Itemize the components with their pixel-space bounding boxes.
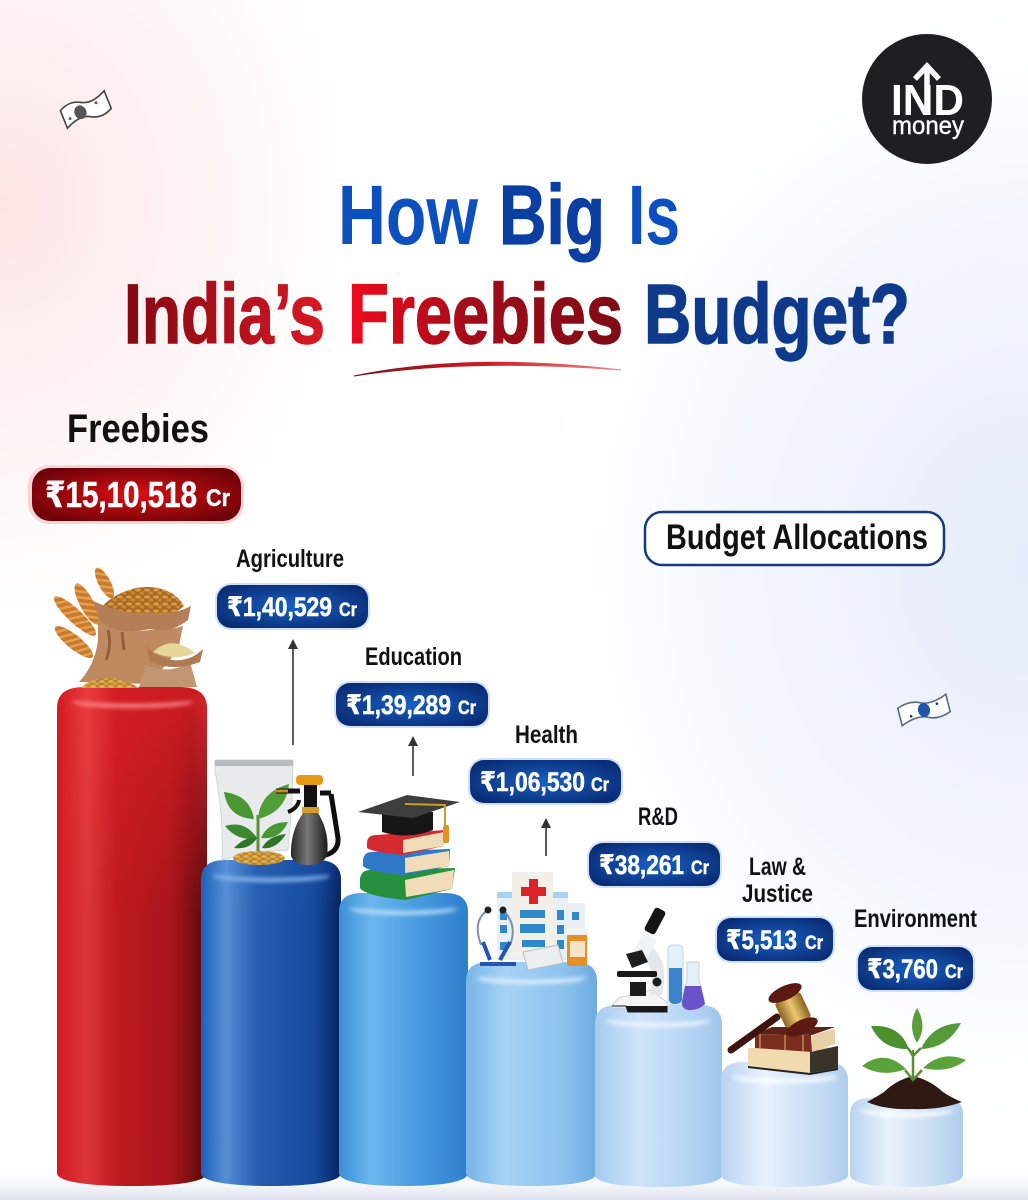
health value pill: ₹1,06,530 xyxy=(480,767,585,797)
environment value pill: ₹3,760 xyxy=(867,954,938,984)
cylinder: freebies xyxy=(57,687,207,1186)
arrow: health xyxy=(541,818,551,856)
icon: fertilizer bag, plant and sprayer xyxy=(215,760,338,865)
environment value pill xyxy=(856,945,975,992)
education value pill: Cr xyxy=(458,698,477,719)
freebies value pill: ₹15,10,518 xyxy=(45,474,197,515)
cylinder: environment xyxy=(850,1098,963,1187)
education value pill: ₹1,39,289 xyxy=(346,690,451,720)
r&d value pill: ₹38,261 xyxy=(599,850,684,880)
law & justice value pill: Cr xyxy=(805,933,824,954)
agriculture value pill: Cr xyxy=(339,600,358,621)
r&d label: R&D xyxy=(638,803,678,831)
agriculture value pill: ₹1,40,529 xyxy=(227,592,332,622)
icon: graduation cap and books xyxy=(358,795,460,900)
title line 1: How xyxy=(338,168,479,262)
budget allocations label xyxy=(645,512,944,565)
title line 1: Is xyxy=(628,168,680,262)
health value pill xyxy=(468,758,623,805)
law & justice value pill xyxy=(715,916,835,963)
arrow: education xyxy=(408,736,418,776)
title line 1 xyxy=(338,168,680,262)
cylinder: r&d xyxy=(595,1005,722,1187)
environment label: Environment xyxy=(854,905,978,933)
title line 2: India’s xyxy=(124,267,325,361)
logo wordmark money: money xyxy=(892,112,964,140)
title line 2 xyxy=(124,267,910,361)
law & justice label xyxy=(742,853,813,908)
education label: Education xyxy=(365,643,462,671)
cylinder: agriculture xyxy=(201,860,341,1186)
freebies value pill: Cr xyxy=(206,485,230,512)
law & justice value pill: ₹5,513 xyxy=(726,925,797,955)
budget allocations label: Budget Allocations xyxy=(666,518,928,557)
icon: banknote right xyxy=(897,694,951,726)
logo: INDmoney xyxy=(862,34,992,164)
health value pill: Cr xyxy=(591,775,610,796)
r&d value pill: Cr xyxy=(691,858,710,879)
law & justice label: Law & xyxy=(749,853,806,881)
education value pill xyxy=(334,681,490,728)
health label: Health xyxy=(515,721,578,749)
title underline swoosh xyxy=(354,362,621,376)
icon: microscope and flasks xyxy=(612,907,705,1012)
title xyxy=(124,168,910,361)
environment value pill: Cr xyxy=(945,962,964,983)
icon: grain sacks and wheat xyxy=(50,565,203,688)
law & justice label: Justice xyxy=(742,880,813,908)
icon: gavel and law books xyxy=(731,979,838,1075)
freebies label: Freebies xyxy=(67,407,209,451)
title line 2: Budget? xyxy=(644,267,910,361)
r&d value pill xyxy=(587,841,722,888)
agriculture value pill xyxy=(215,583,370,630)
freebies value pill xyxy=(28,465,244,524)
icon: plant in soil xyxy=(862,1008,966,1109)
arrow: agriculture xyxy=(288,639,298,745)
logo wordmark IND: IND xyxy=(891,76,964,125)
agriculture label: Agriculture xyxy=(236,545,344,573)
icon: banknote top left xyxy=(59,90,112,129)
title line 2: Freebies xyxy=(348,267,623,361)
logo up arrow xyxy=(915,66,939,112)
cylinder: law & justice xyxy=(721,1062,848,1187)
icon: hospital, stethoscope, medicines xyxy=(478,872,587,970)
cylinder: education xyxy=(339,893,468,1186)
cylinder: health xyxy=(466,962,597,1186)
title line 1: Big xyxy=(499,168,605,262)
